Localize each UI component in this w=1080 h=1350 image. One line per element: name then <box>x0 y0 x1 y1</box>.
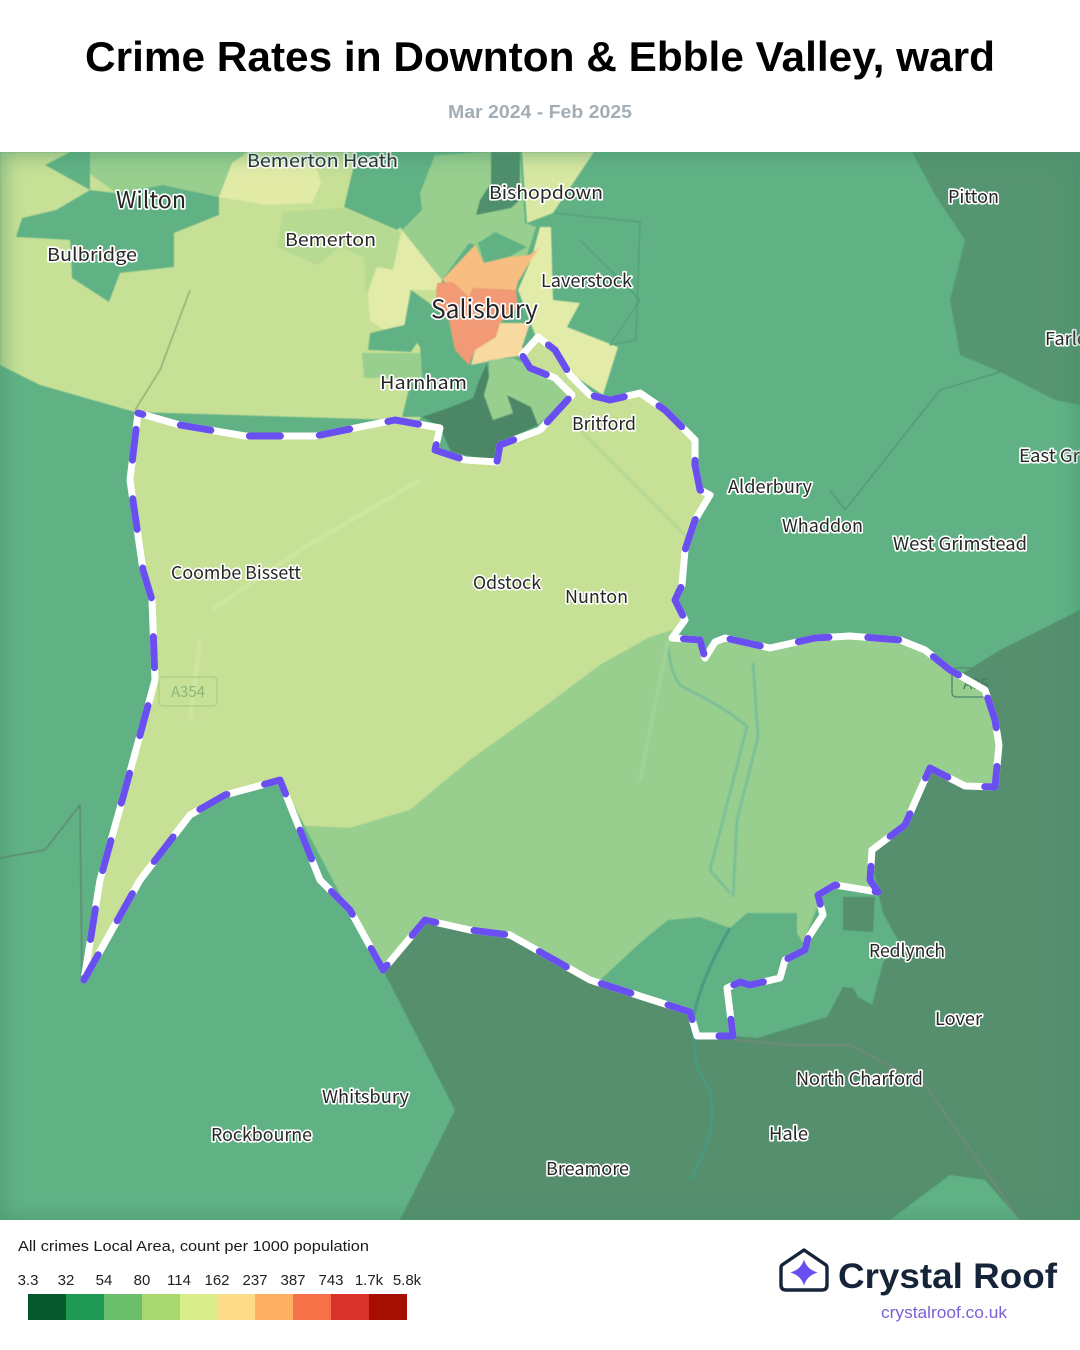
label: Odstock: Odstock <box>473 569 541 595</box>
label: Bulbridge: Bulbridge <box>47 241 137 267</box>
legend scale labels: 162 <box>204 1272 230 1289</box>
legend colour bar <box>28 1294 407 1320</box>
region: north-west yellow-green <box>0 152 442 420</box>
ward fill <box>90 342 996 980</box>
road label: A36: A36 <box>963 673 989 694</box>
label: Whitsbury: Whitsbury <box>322 1083 410 1109</box>
label: Laverstock: Laverstock <box>541 267 632 293</box>
rivers and roads <box>0 213 1020 1220</box>
label: Alderbury: Alderbury <box>728 473 813 499</box>
label: Breamore: Breamore <box>546 1155 629 1181</box>
place labels <box>47 147 1080 1181</box>
label: Whaddon: Whaddon <box>782 512 863 538</box>
region: dark patch near Redlynch <box>843 897 875 932</box>
ward boundary: white line with purple dashes <box>84 337 999 1036</box>
legend title: All crimes Local Area, count per 1000 population <box>18 1238 369 1255</box>
legend scale labels: 32 <box>58 1272 74 1289</box>
website url: crystalroof.co.uk <box>881 1304 1008 1322</box>
legend scale labels: 80 <box>134 1272 150 1289</box>
legend scale labels: 387 <box>280 1272 306 1289</box>
region: south-east dark area <box>383 610 1080 1220</box>
legend scale labels: 743 <box>318 1272 344 1289</box>
logo wordmark: Crystal Roof <box>838 1257 1057 1296</box>
region: north-east dark area <box>912 152 1080 405</box>
title: Crime Rates in Downton & Ebble Valley, ward <box>85 33 995 80</box>
road label: A36 <box>951 667 988 698</box>
label: Redlynch: Redlynch <box>869 937 945 963</box>
legend scale labels: 54 <box>96 1272 112 1289</box>
label: Britford: Britford <box>572 410 636 436</box>
road label: A354: A354 <box>171 681 205 702</box>
label: Coombe Bissett: Coombe Bissett <box>171 559 301 585</box>
legend scale labels: 237 <box>242 1272 268 1289</box>
label: Wilton: Wilton <box>116 181 186 215</box>
region: Bemerton Heath pale <box>219 152 321 205</box>
label: Bemerton Heath: Bemerton Heath <box>247 147 398 173</box>
region: north light green <box>89 152 245 197</box>
road label: A354 <box>159 677 217 706</box>
region: Bishopdown dark <box>476 152 520 215</box>
region: south Harnham dark <box>422 363 538 462</box>
logo: Crystal Roof <box>781 1250 1057 1322</box>
label: Bemerton: Bemerton <box>285 226 376 252</box>
region: north Salisbury light green <box>402 152 536 280</box>
legend scale labels: 3.3 <box>18 1272 38 1289</box>
label: Harnham: Harnham <box>380 369 467 395</box>
ward south: light green area <box>280 630 1010 980</box>
label: Hale: Hale <box>769 1120 808 1146</box>
region: north-east pale <box>522 152 594 223</box>
region: west Salisbury pale yellow <box>368 230 442 330</box>
label: West Grimstead: West Grimstead <box>893 530 1027 556</box>
region: Harnham green <box>402 290 487 417</box>
legend scale labels: 1.7k <box>355 1272 384 1289</box>
label: Lover: Lover <box>935 1005 983 1031</box>
region: Salisbury south pale orange <box>471 323 530 365</box>
legend <box>18 1238 422 1320</box>
region: east Salisbury pale yellow <box>518 227 618 395</box>
region: Wilton green <box>16 152 219 302</box>
icon: house with star <box>781 1250 827 1290</box>
region: west Harnham green <box>368 325 417 352</box>
legend scale labels <box>18 1272 422 1289</box>
label: Rockbourne: Rockbourne <box>211 1121 312 1147</box>
region: west Harnham light green <box>362 352 422 378</box>
subtitle: date range: Mar 2024 - Feb 2025 <box>448 102 632 122</box>
region: Salisbury centre north orange <box>442 245 540 297</box>
legend scale labels: 5.8k <box>393 1272 422 1289</box>
label: Nunton: Nunton <box>565 583 628 609</box>
region: north Salisbury green <box>344 152 401 230</box>
region: bottom-right lighter patch <box>890 1175 1020 1220</box>
label: North Charford: North Charford <box>796 1065 923 1091</box>
region: Bemerton light green <box>277 208 400 293</box>
region: Salisbury centre red-orange <box>435 282 518 365</box>
ward north: yellow-green area <box>90 342 705 961</box>
region: Britford light green <box>484 358 571 425</box>
label: Bishopdown: Bishopdown <box>489 179 603 205</box>
label: Salisbury: Salisbury <box>431 290 538 326</box>
region: north-east of Salisbury green <box>478 232 527 263</box>
label: Pitton: Pitton <box>948 183 999 209</box>
legend scale labels: 114 <box>167 1272 191 1289</box>
